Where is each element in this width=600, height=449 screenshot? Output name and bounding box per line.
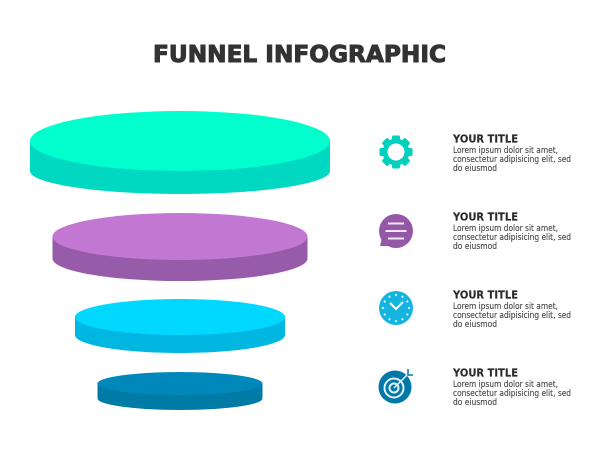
text block 4: YOUR TITLE <box>452 366 518 380</box>
icon: speech bubble <box>379 214 413 248</box>
text block 2: YOUR TITLE <box>452 210 518 224</box>
text block 4: consectetur adipisicing elit, sed <box>453 388 571 398</box>
text block 3: do eiusmod <box>453 319 497 329</box>
icon: clock <box>379 291 413 325</box>
text block 3: YOUR TITLE <box>452 288 518 302</box>
text block 1: consectetur adipisicing elit, sed <box>453 154 571 164</box>
funnel disc 2: purple <box>52 213 308 281</box>
text block 3: Lorem ipsum dolor sit amet, <box>453 301 558 311</box>
text block 4 <box>452 366 571 407</box>
text block 1 <box>452 132 571 173</box>
icon: gear <box>380 136 412 168</box>
icon: target <box>378 369 413 404</box>
funnel disc 4: dark blue <box>98 372 262 410</box>
text block 4: do eiusmod <box>453 397 497 407</box>
text block 1: YOUR TITLE <box>452 132 518 146</box>
text block 3 <box>452 288 571 329</box>
text block 3: consectetur adipisicing elit, sed <box>453 310 571 320</box>
text block 1: do eiusmod <box>453 163 497 173</box>
text block 2: Lorem ipsum dolor sit amet, <box>453 223 558 233</box>
funnel disc 3: light blue <box>75 299 285 353</box>
funnel chart <box>30 111 330 410</box>
text block 2: do eiusmod <box>453 241 497 251</box>
funnel disc 1: teal <box>30 111 330 194</box>
text block 2: consectetur adipisicing elit, sed <box>453 232 571 242</box>
text block 4: Lorem ipsum dolor sit amet, <box>453 379 558 389</box>
text block 1: Lorem ipsum dolor sit amet, <box>453 145 558 155</box>
text block 2 <box>452 210 571 251</box>
title: FUNNEL INFOGRAPHIC <box>153 42 446 68</box>
